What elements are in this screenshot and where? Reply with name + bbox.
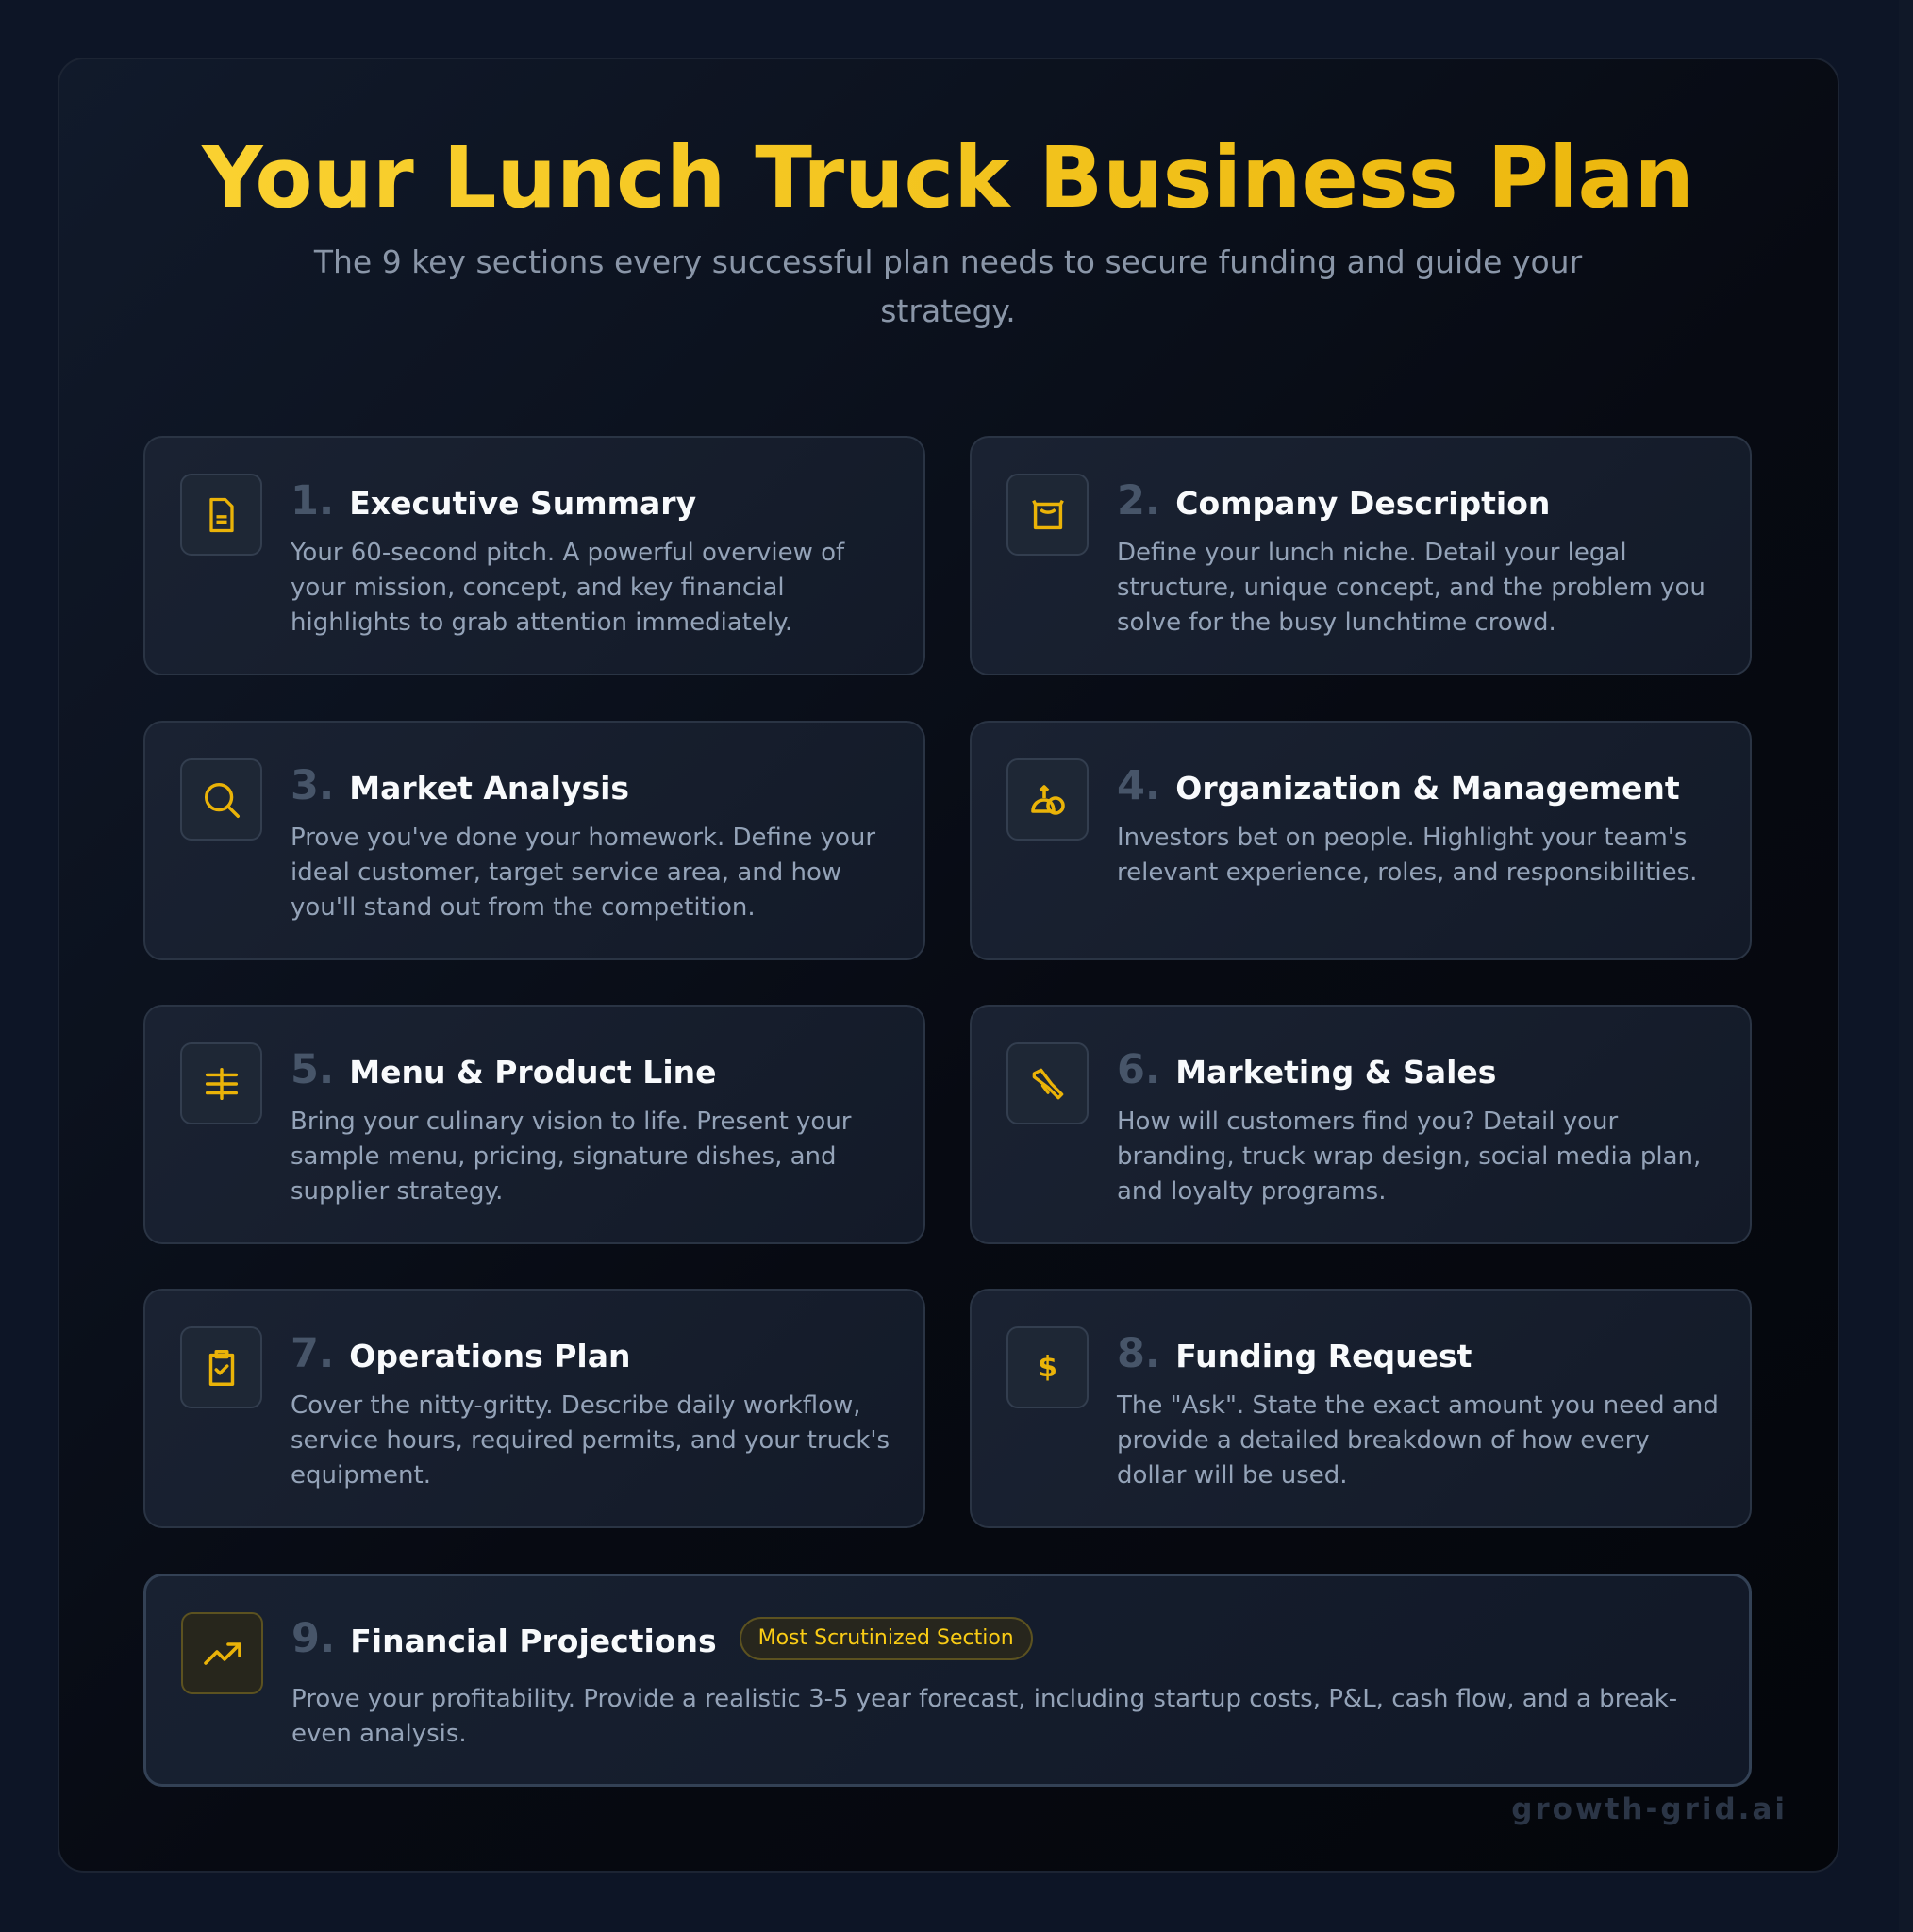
icon: trend bbox=[181, 1612, 263, 1694]
heading: Operations Plan bbox=[349, 1338, 631, 1374]
card 4: organization bbox=[970, 721, 1752, 960]
card 9: financial projections bbox=[143, 1574, 1752, 1787]
heading bbox=[291, 762, 629, 809]
icon: document bbox=[180, 474, 262, 556]
icon: search bbox=[180, 758, 262, 841]
card 3: market analysis bbox=[143, 721, 925, 960]
subtitle: The 9 key sections every successful plan needs to secure funding and guide your strategy. bbox=[314, 243, 1582, 329]
icon: clipboard bbox=[180, 1326, 262, 1408]
card 6: marketing bbox=[970, 1005, 1752, 1244]
heading bbox=[1117, 1330, 1472, 1377]
description: The "Ask". State the exact amount you need and provide a detailed breakdown of how every dollar will be used. bbox=[1117, 1391, 1719, 1490]
heading: Organization & Management bbox=[1175, 770, 1680, 807]
heading: 8. bbox=[1117, 1330, 1160, 1377]
card 8: funding bbox=[970, 1289, 1752, 1528]
description: Define your lunch niche. Detail your legal structure, unique concept, and the problem you solve for the busy lunchtime crowd. bbox=[1117, 539, 1705, 637]
heading: Company Description bbox=[1175, 485, 1550, 522]
heading: Executive Summary bbox=[349, 485, 696, 522]
heading: 5. bbox=[291, 1046, 334, 1093]
heading: Funding Request bbox=[1175, 1338, 1472, 1374]
heading: Market Analysis bbox=[349, 770, 629, 807]
description: Cover the nitty-gritty. Describe daily workflow, service hours, required permits, and your truck's equipment. bbox=[291, 1391, 890, 1490]
card 2: company description bbox=[970, 436, 1752, 675]
heading bbox=[291, 477, 696, 525]
description: Your 60-second pitch. A powerful overview of your mission, concept, and key financial highlights to grab attention immediately. bbox=[291, 539, 844, 637]
heading: 6. bbox=[1117, 1046, 1160, 1093]
heading with badge: Financial Projections bbox=[350, 1623, 717, 1659]
card 7: operations bbox=[143, 1289, 925, 1528]
heading bbox=[1117, 762, 1680, 809]
icon: truck box bbox=[1006, 474, 1089, 556]
heading bbox=[1117, 477, 1550, 525]
heading: Menu & Product Line bbox=[349, 1054, 717, 1091]
heading bbox=[291, 1046, 717, 1093]
heading: 2. bbox=[1117, 477, 1160, 525]
heading: 4. bbox=[1117, 762, 1160, 809]
watermark: growth-grid.ai bbox=[1511, 1792, 1788, 1826]
heading: 3. bbox=[291, 762, 334, 809]
description: Prove your profitability. Provide a realistic 3-5 year forecast, including startup costs, P&L, cash flow, and a break-even analysis. bbox=[291, 1685, 1677, 1748]
description: How will customers find you? Detail your branding, truck wrap design, social media plan, and loyalty programs. bbox=[1117, 1108, 1701, 1206]
card 1: executive summary bbox=[143, 436, 925, 675]
description: Investors bet on people. Highlight your team's relevant experience, roles, and responsibilities. bbox=[1117, 824, 1697, 887]
heading with badge: 9. bbox=[291, 1615, 335, 1662]
description: Bring your culinary vision to life. Present your sample menu, pricing, signature dishes, and supplier strategy. bbox=[291, 1108, 851, 1206]
icon: dollar: $ bbox=[1038, 1351, 1057, 1384]
card 5: menu bbox=[143, 1005, 925, 1244]
heading bbox=[1117, 1046, 1496, 1093]
icon: megaphone bbox=[1006, 1042, 1089, 1124]
icon: menu lines bbox=[180, 1042, 262, 1124]
title: Your Lunch Truck Business Plan bbox=[202, 128, 1694, 226]
heading with badge bbox=[291, 1615, 1033, 1662]
heading bbox=[291, 1330, 631, 1377]
icon: dollar bbox=[1006, 1326, 1089, 1408]
icon: team bbox=[1006, 758, 1089, 841]
heading: 1. bbox=[291, 477, 334, 525]
description: Prove you've done your homework. Define your ideal customer, target service area, and how you'll stand out from the competition. bbox=[291, 824, 875, 922]
heading: Marketing & Sales bbox=[1175, 1054, 1496, 1091]
heading with badge: Most Scrutinized Section bbox=[758, 1626, 1014, 1650]
heading: 7. bbox=[291, 1330, 334, 1377]
